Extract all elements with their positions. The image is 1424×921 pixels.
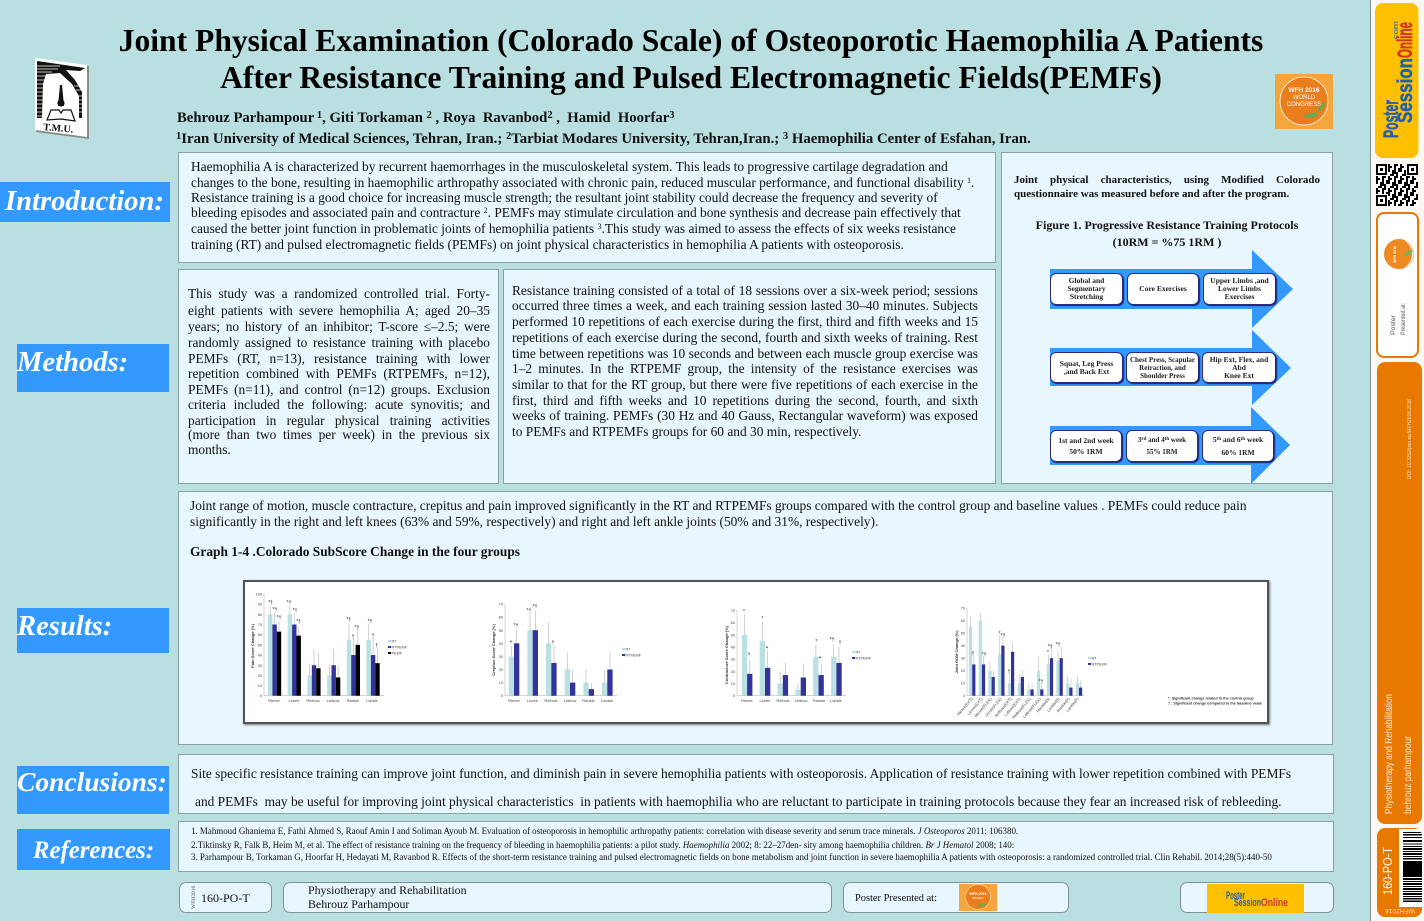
sidebar logo: PosterSessionOnline: Session <box>1394 58 1417 123</box>
chart 2: crepitus score: Rknee <box>508 698 521 703</box>
chart 2: crepitus score <box>491 602 642 703</box>
chart 1: pain score: Rknee <box>268 698 281 703</box>
QR code <box>1376 164 1418 206</box>
chart 3: contracture score: * <box>743 609 745 615</box>
panel: methods training protocol: occurred three times a week, and each training session lasted 30–40 minutes. Subjects <box>512 298 978 313</box>
sidebar box: poster id and barcode: 160-PO-T <box>1381 847 1395 895</box>
chart footnotes: † : Significant change compared to the baseline value <box>1168 702 1262 706</box>
chart 2: crepitus score: † <box>552 640 555 646</box>
chart 4: joint ROM: 0 <box>963 694 965 698</box>
chart 4: joint ROM: Lelbow(EXT) <box>1003 696 1022 717</box>
chart 4: joint ROM: † <box>1008 669 1011 675</box>
chart footnotes <box>1168 696 1262 706</box>
affiliations: 1Iran University of Medical Sciences, Tehran, Iran.; 2Tarbiat Modares University, Tehran,Iran.; 3 Haemophilia Center of Esfahan, Iran. <box>176 131 1031 147</box>
panel: methods study design: This study was a randomized controlled trial. Forty- <box>188 286 490 301</box>
box: squat <box>1050 352 1123 383</box>
logo: WFH 2016 World Congress: WORLD <box>1293 95 1316 101</box>
box: stretching: Stretching <box>1070 292 1103 301</box>
box: squat: ,and Back Ext <box>1064 366 1109 376</box>
box: week 5-6: 60% 1RM <box>1221 448 1255 457</box>
sidebar box: poster id and barcode <box>1377 828 1422 917</box>
icon: WFH logo: WFH 2016 <box>969 892 987 896</box>
sidebar label: Poster <box>1390 314 1397 335</box>
panel: methods training protocol: weeks of training. PEMFs (30 Hz and 40 Gauss, Rectangular waveform) was exposed <box>512 408 978 423</box>
box: limb exercises: Upper Limbs ,and <box>1210 276 1269 285</box>
chart 3: contracture score: 10 <box>731 682 735 686</box>
charts frame <box>243 580 1269 724</box>
figure heading: (10RM = %75 1RM ) <box>1113 235 1221 249</box>
sidebar box: orange topic band: DOI: 10.3252/pso.eu.WFH2016.2016 <box>1407 399 1413 479</box>
box: chest press <box>1126 352 1199 383</box>
sidebar background <box>1370 0 1424 921</box>
box: chest press: Retraction, and <box>1139 364 1186 372</box>
chart 1: pain score: 0 <box>260 694 262 698</box>
chart 4: joint ROM: Rankle(P) <box>1055 696 1071 713</box>
panel: methods training protocol: performed 10 repetitions of each exercise during the first, third and fifth weeks and 15 <box>512 314 978 329</box>
panel: methods training protocol: similar to that for the RT group, but there were five repetitions of each exercise in the <box>512 377 978 392</box>
chart 3: contracture score: * <box>762 616 764 622</box>
chart 3: contracture score: 60 <box>731 621 735 625</box>
chart 1: pain score: *† <box>293 608 298 614</box>
chart 4: joint ROM: 30 <box>961 656 965 660</box>
section label: Results: Results: <box>17 611 112 642</box>
figure heading: Figure 1. Progressive Resistance Training Protocols <box>1036 218 1298 232</box>
chart 2: crepitus score: Lelbow <box>564 698 576 703</box>
chart 4: joint ROM: Rankle(D) <box>1035 696 1051 713</box>
box: chest press: Shoulder Press <box>1140 372 1185 380</box>
panel: conclusions <box>178 754 1334 814</box>
box: hip and knee: Hip Ext, Flex, and <box>1210 354 1268 364</box>
chart 3: contracture score: RT <box>856 650 861 654</box>
chart 4: joint ROM: Relbow(EXT) <box>994 696 1013 718</box>
panel: methods training protocol: to PEMFs and RTPEMFs groups for 60 and 30 min, respectively. <box>512 424 861 439</box>
sidebar logo: PosterSessionOnline: .com <box>1393 21 1400 42</box>
box: stretching: Segmentary <box>1067 284 1106 293</box>
chart 3: contracture score: 50 <box>731 634 735 638</box>
chart 2: crepitus score: RTPEMF <box>626 654 642 658</box>
box: stretching: Global and <box>1069 276 1104 285</box>
chart 4: joint ROM: Lelbow(FLEX) <box>1022 696 1042 719</box>
panel: methods training protocol: 1–2 minutes. In the RTPEMF group, the intensity of the resistance exercises was <box>512 361 978 376</box>
icon: WFH logo <box>959 884 997 911</box>
panel: introduction text: bleeding episodes and associated pain and contracture 2. PEMFs may stimulate circulation and bone synthesis and decrease pain effectively that <box>191 205 961 220</box>
footer box: presented at <box>843 882 1069 913</box>
chart 2: crepitus score: 30 <box>499 655 503 659</box>
chart 4: joint ROM: † <box>972 651 975 657</box>
footer box: topic and author <box>283 882 832 913</box>
panel: references: 3. Parhampour B, Torkaman G, Hoorfar H, Hedayati M, Ravanbod R. Effects of the short-term resistance training and pulsed electromagnetic fields on bone metabolism and joint function in severe haemophilia A patients with osteoporosis: a randomized controlled trial. Clin Rehabil. 2014;28(5):440-50 <box>191 852 1272 862</box>
chart 4: joint ROM: 50 <box>961 632 965 636</box>
panel: methods training protocol: first, third and fifth weeks and 10 repetitions during the second, fourth, and sixth <box>512 393 978 408</box>
chart 4: joint ROM: RT <box>1092 656 1097 660</box>
box: week 5-6: 5th and 6th week <box>1213 435 1263 444</box>
chart 4: joint ROM: RTPEMF <box>1092 662 1108 666</box>
chart 4: joint ROM: 70 <box>961 606 965 610</box>
chart 4: joint ROM: *† <box>1039 679 1044 685</box>
logo: PosterSessionOnline: Poster <box>1226 890 1245 902</box>
chart 3: contracture score: Lknee <box>760 698 771 703</box>
chart 1: pain score: 40 <box>258 654 262 658</box>
panel: methods training protocol: repetitions of each exercise during the second, fourth and sixth weeks of training. Rest <box>512 330 978 345</box>
footer box: presented at: Poster Presented at: <box>855 893 937 904</box>
section label: Introduction: Introduction: <box>5 186 164 217</box>
chart 3: contracture score: † <box>748 652 751 658</box>
logo: PosterSessionOnline: Session <box>1234 897 1261 909</box>
chart 1: pain score: 30 <box>258 664 262 668</box>
chart 1: pain score: *† <box>296 619 301 625</box>
chart 1: pain score: 70 <box>258 623 262 627</box>
chart 2: crepitus score: Lankle <box>601 698 614 703</box>
chart 1: pain score: *† <box>277 615 282 621</box>
box: week 5-6 <box>1202 430 1274 462</box>
results text <box>190 498 1247 529</box>
logo: WFH 2016 World Congress: CONGRESS <box>1287 102 1321 108</box>
chart 2: crepitus score: 40 <box>499 642 503 646</box>
footer box: poster id: WFH2016 <box>191 886 197 909</box>
chart 3: contracture score: Lankle <box>830 698 843 703</box>
chart 1: pain score: † <box>375 643 378 649</box>
chart 3: contracture score: Relbow <box>776 698 790 703</box>
results text: Joint range of motion, muscle contracture, crepitus and pain improved significantly in the RT and RTPEMFs groups compared with the control group and baseline values . PEMFs could reduce pain <box>190 498 1247 513</box>
footer box: poster id: 160-PO-T <box>201 891 250 905</box>
chart 3: contracture score: + <box>766 645 769 651</box>
panel: figure 1 resistance training protocols <box>1001 152 1333 484</box>
chart 1: pain score: RT <box>392 640 397 644</box>
chart 3: contracture score <box>724 609 872 703</box>
footer box: poster id <box>179 882 272 913</box>
chart 1: pain score: Pain Score Change (%) <box>250 623 255 668</box>
panel: methods study design: (more than two times per week) in the previous six <box>188 427 490 442</box>
panel: results <box>178 491 1333 745</box>
chart 1: pain score: *† <box>287 600 292 606</box>
panel: conclusions: and PEMFs may be useful for improving joint physical characteristics in patients with haemophilia who are reluctant to participate in training protocols because they fear an increased risk of rebleeding. <box>195 794 1282 809</box>
logo: T.M.U. university <box>35 58 89 139</box>
chart 3: contracture score: + <box>819 655 822 661</box>
chart footnotes: *: Significant change related to the control group <box>1168 696 1254 700</box>
box: week 1-2: 1st and 2nd week <box>1058 436 1114 445</box>
chart 4: joint ROM: 60 <box>961 619 965 623</box>
chart 1: pain score: 90 <box>258 602 262 606</box>
panel: references: 2.Tiktinsky R, Falk B, Heim M, et al. The effect of resistance training on the frequency of bleeding in haemophilia patients: a pilot study. Haemophilia 2002; 8: 22–27den- sity among haemophilia children. Br J Hematol 2008; 140: <box>191 840 1014 850</box>
chart 1: pain score: RTPEMF <box>392 646 408 650</box>
chart 3: contracture score: Rankle <box>813 698 826 703</box>
chart 2: crepitus score: *† <box>527 608 532 614</box>
chart 2: crepitus score: Relbow <box>544 698 558 703</box>
chart 1: pain score: Rankle <box>347 698 360 703</box>
chart 4: joint ROM: Lankle(P) <box>1065 696 1080 713</box>
footer box: topic and author: Behrouz Parhampour <box>308 897 409 911</box>
box: week 3-4 <box>1126 430 1198 462</box>
chart 1: pain score: *† <box>368 619 373 625</box>
chart 3: contracture score: Rknee <box>741 698 754 703</box>
panel: methods study design: years; no history of an inhibitor; T-score ≤–2.5; were <box>188 319 490 334</box>
chart 3: contracture score: *† <box>830 637 835 643</box>
sidebar label <box>1390 303 1407 335</box>
panel: methods study design: participation in regular physical training activities <box>188 413 490 428</box>
section label: Methods: Methods: <box>17 347 128 378</box>
chart 3: contracture score: 0 <box>733 694 735 698</box>
results text: significantly in the right and left knees (63% and 59%, respectively) and right and left ankle joints (50% and 31%, respectively). <box>190 514 878 529</box>
logo: WFH 2016 World Congress: WFH 2016 <box>1288 87 1320 94</box>
arrow: row 3 <box>1050 407 1290 484</box>
logo: PosterSessionOnline: Online <box>1261 897 1288 909</box>
arrow: row 1 <box>1050 250 1293 328</box>
chart 2: crepitus score: Crepitus Score Change (%) <box>491 624 496 676</box>
chart 4: joint ROM: Relbow(FLEX) <box>1011 696 1032 720</box>
chart 1: pain score <box>250 592 408 703</box>
chart 4: joint ROM: *† <box>1001 633 1006 639</box>
chart 3: contracture score: 20 <box>731 670 735 674</box>
box: core exercises: Core Exercises <box>1139 284 1187 293</box>
chart 4: joint ROM: *† <box>982 652 987 658</box>
footer box: PosterSessionOnline <box>1180 882 1334 913</box>
sidebar box: orange topic band <box>1377 362 1422 824</box>
chart 1: pain score: Lankle <box>366 698 379 703</box>
section label: Results <box>17 608 169 653</box>
title: After Resistance Training and Pulsed Electromagnetic Fields(PEMFs) <box>220 60 1162 95</box>
box: stretching <box>1050 273 1123 305</box>
barcode <box>1403 832 1422 902</box>
panel: references <box>178 821 1334 872</box>
box: week 3-4: 3rd and 4th week <box>1138 436 1186 444</box>
sidebar box: poster id and barcode: WFH2016 <box>1385 907 1415 914</box>
chart 2: crepitus score: Rankle <box>582 698 596 703</box>
chart 1: pain score: 80 <box>258 613 262 617</box>
chart 4: joint ROM: 10 <box>961 682 965 686</box>
text: questionnaire note <box>1014 174 1320 200</box>
panel: methods study design: repetition combined with PEMFs (RTPEMFs, n=12), <box>188 366 490 381</box>
panel: methods training protocol <box>503 269 996 484</box>
box: limb exercises: Lower Limbs <box>1218 284 1261 293</box>
chart 1: pain score: *† <box>355 625 360 631</box>
chart 4: joint ROM: 20 <box>961 669 965 673</box>
sidebar box: presented at <box>1376 212 1419 358</box>
panel: conclusions: Site specific resistance training can improve joint function, and diminish pain in severe hemophilia patients with osteoporosis. Application of resistance training with lower repetition combined with PEMFs <box>191 766 1291 781</box>
chart 4: joint ROM: Lknee(FLEX) <box>984 696 1003 718</box>
chart 1: pain score: *† <box>273 607 278 613</box>
box: week 1-2 <box>1050 430 1122 462</box>
icon: WFH logo: WFH 2016 <box>1393 246 1397 263</box>
chart 4: joint ROM: Rknee(EXT) <box>956 696 974 717</box>
chart 1: pain score: 100 <box>256 592 262 596</box>
panel: methods training protocol: Resistance training consisted of a total of 18 sessions over a six-week period; sessions <box>512 283 978 298</box>
chart 4: joint ROM: *† <box>1056 642 1061 648</box>
logo: WFH 2016 World Congress <box>1275 74 1333 129</box>
graph heading: Graph 1-4 .Colorado SubScore Change in the four groups <box>190 544 520 559</box>
box: squat: Squat, Leg Press <box>1060 358 1113 368</box>
box: week 1-2: 50% 1RM <box>1069 447 1103 456</box>
chart 4: joint ROM: Joint ROM Change (%) <box>954 630 959 674</box>
chart 1: pain score: † <box>352 634 355 640</box>
panel: methods study design: months. <box>188 442 231 457</box>
box: hip and knee: Knee Ext <box>1224 370 1254 380</box>
box: week 3-4: 55% 1RM <box>1147 448 1177 456</box>
chart 1: pain score: 20 <box>258 674 262 678</box>
sidebar box: orange topic band: Physiotherapy and Rehabilitation <box>1384 694 1395 814</box>
chart 4: joint ROM: Lankle(D) <box>1046 696 1061 713</box>
panel: introduction text: training (RT) and pulsed electromagnetic fields (PEMFs) on joint physical characteristics in hemophilia A patients with osteoporosis. <box>191 237 904 252</box>
chart 4: joint ROM: *† <box>1048 644 1053 650</box>
panel: introduction text <box>178 152 996 263</box>
section label: Conclusions <box>17 766 169 814</box>
chart 4: joint ROM <box>954 606 1108 720</box>
chart 2: crepitus score: Lknee <box>527 698 539 703</box>
chart 2: crepitus score: *† <box>533 604 538 610</box>
icon: WFH logo <box>1384 239 1414 269</box>
panel: introduction text: Resistance training is a good choice for increasing muscle strength; the resultant joint stability could decrease the frequency and severity of <box>191 190 938 205</box>
panel: methods study design: eight patients with severe hemophilia A; aged 20–35 <box>188 303 490 318</box>
chart 3: contracture score: Lelbow <box>795 698 807 703</box>
chart 2: crepitus score: 50 <box>499 629 503 633</box>
chart 4: joint ROM: Rknee(FLEX) <box>973 696 993 718</box>
panel: references: 1. Mahmoud Ghaniema E, Fathi Ahmed S, Raouf Amin I and Soliman Ayoub M. Evaluation of osteoporosis in hemophilic arthropathy patients: correlation with disease severity and serum trace minerals. J Osteoporos 2011: 106380. <box>191 826 1018 836</box>
text: questionnaire note: Joint physical characteristics, using Modified Colorado <box>1014 174 1320 186</box>
box: limb exercises <box>1203 273 1276 305</box>
chart 2: crepitus score: *† <box>514 623 519 629</box>
box: hip and knee <box>1202 352 1276 383</box>
logo lettering: T.M.U. <box>43 122 74 136</box>
chart 1: pain score: Relbow <box>306 698 320 703</box>
panel: introduction text: Haemophilia A is characterized by recurrent haemorrhages in the musculoskeletal system. This leads to progressive cartilage degradation and <box>191 159 948 174</box>
chart 3: contracture score: * <box>815 639 817 645</box>
sidebar logo: PosterSessionOnline: Poster <box>1380 100 1403 138</box>
chart 4: joint ROM: Lknee(EXT) <box>966 696 984 716</box>
text: questionnaire note: questionnaire was measured before and after the program. <box>1014 188 1289 200</box>
panel: methods study design <box>178 269 499 484</box>
box: limb exercises: Exercises <box>1225 292 1254 301</box>
panel: methods training protocol: time between repetitions was 10 seconds and between each muscle group exercise was <box>512 346 978 361</box>
chart 3: contracture score: 70 <box>731 609 735 613</box>
chart 3: contracture score: 40 <box>731 646 735 650</box>
panel: methods study design: PEMFs (n=11), and control (n=12) groups. Exclusion <box>188 382 490 397</box>
box: chest press: Chest Press, Scapular <box>1130 356 1195 364</box>
chart 1: pain score: 50 <box>258 644 262 648</box>
chart 1: pain score: PEMF <box>392 652 403 656</box>
chart 1: pain score: † <box>372 633 375 639</box>
section label: Conclusions: Conclusions: <box>17 766 167 797</box>
panel: introduction text: changes to the bone, resulting in haemophilic arthropathy associated with chronic pain, reduced muscular performance, and functional disability 1. <box>191 175 974 190</box>
chart 1: pain score: *† <box>346 617 351 623</box>
sidebar logo: PosterSessionOnline <box>1375 3 1418 158</box>
chart 3: contracture score: † <box>839 640 842 646</box>
chart 4: joint ROM: * <box>999 631 1001 637</box>
arrow: row 2 <box>1050 330 1291 405</box>
chart 2: crepitus score: 0 <box>501 694 503 698</box>
box: core exercises <box>1127 273 1199 305</box>
chart 1: pain score: *† <box>268 600 273 606</box>
section label: References: References: <box>33 837 154 864</box>
box: hip and knee: Abd <box>1232 362 1246 372</box>
chart 1: pain score: 10 <box>258 684 262 688</box>
footer box: topic and author: Physiotherapy and Rehabilitation <box>308 883 467 897</box>
panel: methods study design: PEMFs (RT, n=13), resistance training with lower <box>188 351 490 366</box>
figure heading <box>1036 218 1298 249</box>
authors: Behrouz Parhampour 1, Giti Torkaman 2 , Roya Ravanbod2 , Hamid Hoorfar3 <box>177 110 674 126</box>
title: Joint Physical Examination (Colorado Scale) of Osteoporotic Haemophilia A Patients <box>119 23 1263 58</box>
title <box>119 23 1263 95</box>
panel: methods study design: randomly assigned to resistance training with placebo <box>188 335 490 350</box>
logo: PosterSessionOnline <box>1207 884 1304 913</box>
chart 3: contracture score: RTPEMF <box>856 656 872 660</box>
chart 2: crepitus score: 60 <box>499 616 503 620</box>
panel: methods study design: criteria included the following: acute synovitis; and <box>188 397 490 412</box>
chart 1: pain score: Lknee <box>289 698 300 703</box>
sidebar box: orange topic band: behrouz parhampour <box>1403 736 1414 814</box>
chart 2: crepitus score: 70 <box>499 602 503 606</box>
chart 1: pain score: 60 <box>258 633 262 637</box>
chart 3: contracture score: 30 <box>731 658 735 662</box>
chart 2: crepitus score: 20 <box>499 668 503 672</box>
chart 1: pain score: Lelbow <box>327 698 339 703</box>
chart 4: joint ROM: 40 <box>961 644 965 648</box>
chart 2: crepitus score: + <box>510 639 513 645</box>
chart 3: contracture score: Contracture Score Change (%) <box>724 625 729 684</box>
section label: References <box>17 829 170 870</box>
chart 2: crepitus score: 10 <box>499 681 503 685</box>
chart 4: joint ROM: * <box>1047 650 1049 656</box>
chart 2: crepitus score: RT <box>626 648 631 652</box>
icon: WFH logo: WORLD <box>972 896 984 900</box>
section label: Methods <box>17 344 169 392</box>
panel: introduction text: caused the better joint function in problematic joints of hemophilia patients 3.This study was aimed to assess the effects of six weeks resistance <box>191 221 956 236</box>
